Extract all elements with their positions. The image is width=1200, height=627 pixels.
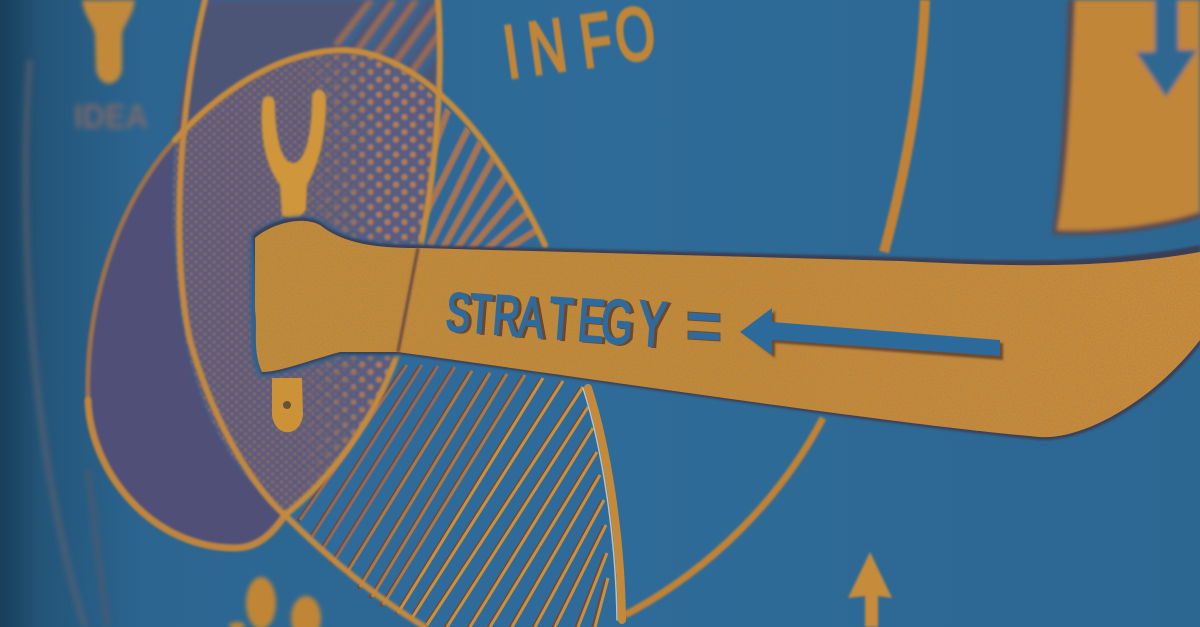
arm shadow <box>253 218 1200 440</box>
text: STRATEGY: S <box>447 283 475 345</box>
text: STRATEGY: Y <box>638 289 672 362</box>
icon: light bulb with label <box>74 0 148 136</box>
text: STRATEGY: T <box>547 285 575 353</box>
icon: bottom dots <box>229 577 321 627</box>
text: INFO: I <box>499 11 524 94</box>
circle arcs <box>88 0 622 627</box>
panel: dotted lens <box>173 50 438 515</box>
arm divider seam <box>398 248 418 352</box>
arc: segment right edge <box>583 388 622 620</box>
text: STRATEGY: E <box>579 287 610 356</box>
text: STRATEGY: S <box>444 282 472 344</box>
tab hole <box>283 401 291 409</box>
hatch lines in upper segment <box>332 0 442 76</box>
arc: left circle <box>88 50 545 548</box>
arrow: bottom up arrow <box>848 552 892 627</box>
bulb label: IDEA <box>74 98 148 136</box>
arrow: pointing at STRATEGY <box>740 308 1003 360</box>
hatch lines <box>300 365 608 627</box>
panel: upper shaded segment <box>174 0 443 135</box>
text: STRATEGY: G <box>599 287 636 358</box>
icon: equals sign <box>688 312 720 341</box>
arm and fist <box>255 221 1200 437</box>
text: STRATEGY <box>444 274 672 362</box>
text: STRATEGY: T <box>550 286 578 354</box>
box face <box>1057 0 1200 230</box>
text: STRATEGY: Y <box>635 288 669 361</box>
panel: dark left lens <box>88 140 285 548</box>
text: STRATEGY: E <box>576 286 607 355</box>
icon: wrench prongs <box>262 90 326 220</box>
panel: top right box with down arrow <box>1052 0 1200 235</box>
text: STRATEGY: A <box>516 285 547 350</box>
text: STRATEGY: A <box>519 286 550 351</box>
panel: hatched wedge top <box>420 106 538 248</box>
text: STRATEGY: G <box>602 288 639 359</box>
text: STRATEGY: R <box>491 284 522 349</box>
icon: down arrow <box>1136 0 1197 97</box>
text: INFO: F <box>575 0 617 84</box>
panel: hatched lower segment <box>285 352 613 627</box>
fist halo <box>255 221 418 372</box>
text: STRATEGY: T <box>470 283 497 346</box>
far left faint circles <box>26 60 108 627</box>
text: STRATEGY: T <box>467 282 494 345</box>
icon: wrench lower tab <box>272 378 303 432</box>
hatch line shadows <box>298 366 606 627</box>
arc: second circle <box>179 0 425 627</box>
large circle outline <box>625 0 925 615</box>
text: INFO: N <box>524 5 571 91</box>
text: STRATEGY: R <box>494 285 525 350</box>
arc: third circle <box>285 0 440 515</box>
